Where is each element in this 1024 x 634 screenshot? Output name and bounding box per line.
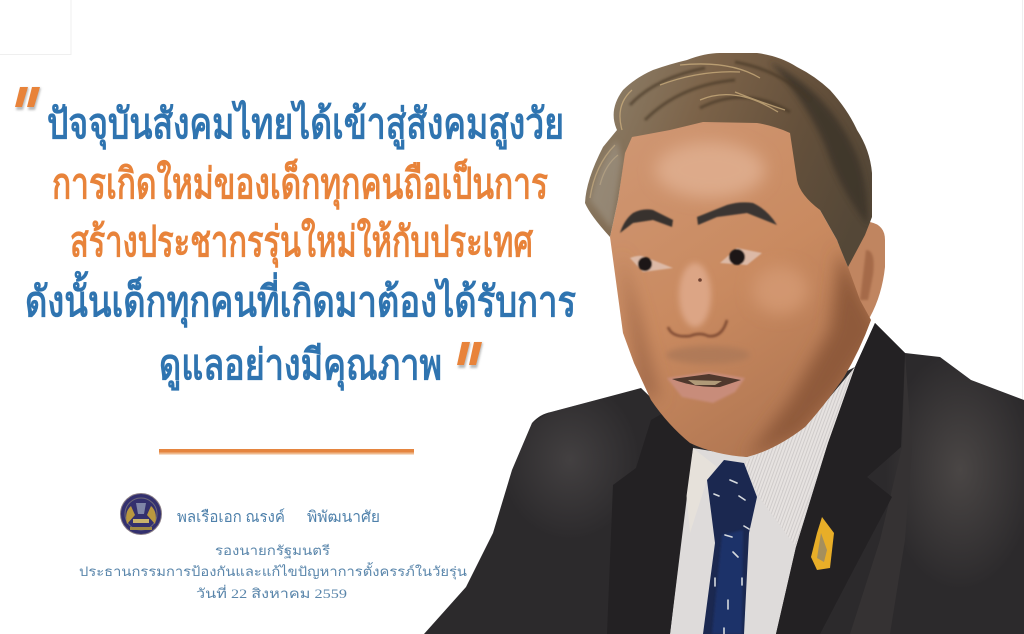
right lapel [776, 323, 905, 634]
shirt [670, 367, 855, 634]
position title: รองนายกรัฐมนตรี [215, 543, 330, 559]
quote line 3: สร้างประชากรรุ่นใหม่ให้กับประเทศ [70, 217, 534, 268]
orange divider [159, 449, 414, 454]
right eye [720, 248, 762, 265]
ear [845, 222, 885, 330]
hair grey wing [590, 140, 622, 230]
quote line 4: ดังนั้นเด็กทุกคนที่เกิดมาต้องได้รับการ [25, 270, 576, 328]
faint frame corner [0, 0, 1022, 400]
committee title: ประธานกรรมการป้องกันและแก้ไขปัญหาการตั้งครรภ์ในวัยรุ่น [79, 562, 467, 580]
jacket [424, 323, 1024, 634]
mouth [667, 372, 745, 403]
face [610, 112, 871, 457]
shirt collar left [686, 448, 717, 533]
surname: พิพัฒนาศัย [307, 509, 380, 526]
closing quotation mark [457, 342, 483, 368]
icon: government seal [120, 494, 162, 534]
hair light strands [590, 64, 785, 198]
eyebrows [620, 202, 777, 233]
gold pin [811, 517, 834, 570]
hair dark strands [630, 62, 810, 120]
nose [668, 278, 727, 336]
jacket shading [500, 350, 1024, 634]
signatory name [177, 508, 380, 526]
quote line 1: ปัจจุบันสังคมไทยได้เข้าสู่สังคมสูงวัย [47, 99, 564, 150]
quote line 2: การเกิดใหม่ของเด็กทุกคนถือเป็นการ [52, 158, 548, 210]
date: วันที่ 22 สิงหาคม 2559 [196, 585, 347, 601]
portrait of the speaker [424, 53, 1024, 634]
tie [703, 460, 757, 634]
quote line 5: ดูแลอย่างมีคุณภาพ [159, 342, 442, 391]
quote text [25, 99, 576, 391]
face shading [620, 142, 880, 460]
rank and first name: พลเรือเอก ณรงค์ [177, 508, 285, 526]
opening quotation mark [15, 87, 41, 110]
ear shading [860, 250, 874, 300]
left eye [630, 256, 673, 272]
hair [585, 53, 872, 267]
shirt collar right [744, 367, 855, 547]
left lapel [607, 400, 693, 634]
hair dark sweep [770, 62, 868, 225]
